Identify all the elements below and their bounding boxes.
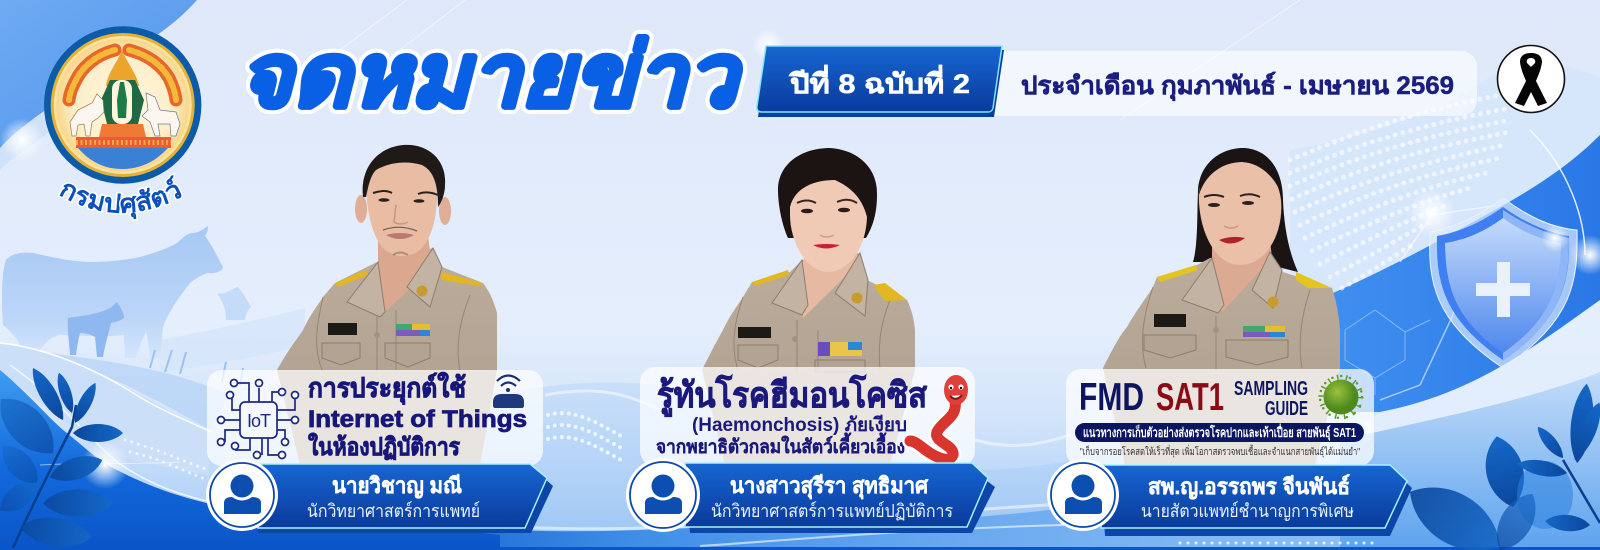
dot pattern [1290,95,1510,288]
icon: mourning ribbon [1498,46,1564,112]
shirt [277,248,497,465]
panel: IoT topic: ในห้องปฏิบัติการ [308,432,460,461]
issue badge: ปีที่ 8 ฉบับที่ 2 [788,64,970,99]
cow silhouettes [0,226,305,475]
title: จดหมายข่าว [239,26,743,125]
badges [1268,296,1278,308]
issue badge [757,46,1004,117]
logo water [78,148,168,169]
panel: IoT topic: การประยุกต์ใช้ [308,372,466,405]
icon: virus [1320,376,1362,418]
panel: FMD SAT1 topic [1066,369,1374,466]
epaulets [335,270,483,287]
logo caption: กรมปศุสัตว์ [58,172,183,221]
name banner 3: นายสัตวแพทย์ชำนาญการพิเศษ [1141,501,1354,521]
date pill [960,51,1477,116]
collar and pockets [1182,252,1282,313]
icon: red worm [910,375,968,459]
avatar 2 [626,458,700,532]
left bottom blue wave [0,343,1600,550]
date pill: ประจำเดือน กุมภาพันธ์ - เมษายน 2569 [1021,71,1454,102]
logo: Department of Livestock Development [44,26,201,184]
name banner 2 [685,463,995,533]
epaulets [752,270,907,301]
name banner 1: นักวิทยาศาสตร์การแพทย์ [307,501,480,521]
right leaf cluster [1397,382,1600,550]
shirt [1103,252,1340,465]
right decorative blue swoosh [1180,63,1600,550]
name banner 2: นักวิทยาศาสตร์การแพทย์ปฏิบัติการ [711,501,953,521]
name banner 3 [1101,465,1412,536]
panel: IoT topic [207,370,543,466]
panel: FMD SAT1 topic: SAT1 [1156,376,1224,419]
panel: Haemonchosis topic: จากพยาธิตัวกลมในสัตว์เคี้ยวเอื้อง [656,432,905,458]
avatar 1 [206,459,278,531]
panel: FMD SAT1 topic: "เก็บจากรอยโรคสดให้เร็วที่สุด เพิ่มโอกาสตรวจพบเชื้อและจำแนกสายพันธุ์ได้แม่นยำ" [1080,444,1360,458]
collar and pockets [772,253,868,316]
collar and pockets [347,248,442,317]
title: จดหมายข่าว [239,26,743,125]
icon: shield [1430,198,1577,368]
logo base band [76,137,171,148]
head [778,148,877,318]
icon: IoT chip [218,380,298,458]
icon: router [493,376,524,408]
panel: FMD SAT1 topic: GUIDE [1265,398,1308,420]
name banner 1: นายวิชาญ มณี [332,473,462,499]
badges [416,286,428,296]
guide pill: แนวทางการเก็บตัวอย่างส่งตรวจโรคปากและเท้าเปื่อย สายพันธุ์ SAT1 [1083,423,1356,441]
panel: FMD SAT1 topic: FMD [1079,376,1144,419]
head [1199,155,1283,312]
badges [852,292,862,304]
panel: FMD SAT1 topic: SAMPLING [1234,378,1308,400]
avatar 3 [1047,459,1119,531]
panel: Haemonchosis topic [640,367,975,466]
shirt [702,253,915,465]
logo horse [142,93,180,136]
epaulets [1157,265,1332,288]
panel: Haemonchosis topic: (Haemonchosis) ภัยเงียบ [692,414,907,436]
person 3 portrait [1103,148,1340,465]
logo flourishes [69,50,176,100]
name banner 2: นางสาวสุรีรา สุทธิมาศ [730,473,929,500]
person 1 portrait [277,145,497,465]
hair back [1193,148,1298,272]
sparkles [0,29,1600,275]
head [355,145,451,312]
logo cow [70,94,104,136]
guide pill [1075,423,1364,442]
name banner 3: สพ.ญ.อรรถพร จีนพันธ์ [1148,474,1350,500]
panel: Haemonchosis topic: รู้ทันโรคฮีมอนโคซิส [657,374,928,417]
left leaf branch [0,364,123,550]
icon: IoT chip: IoT [247,411,271,431]
logo shrine [99,50,146,137]
person 2 portrait [702,148,915,465]
name banner 1 [255,464,553,533]
panel: IoT topic: Internet of Things [308,406,527,433]
